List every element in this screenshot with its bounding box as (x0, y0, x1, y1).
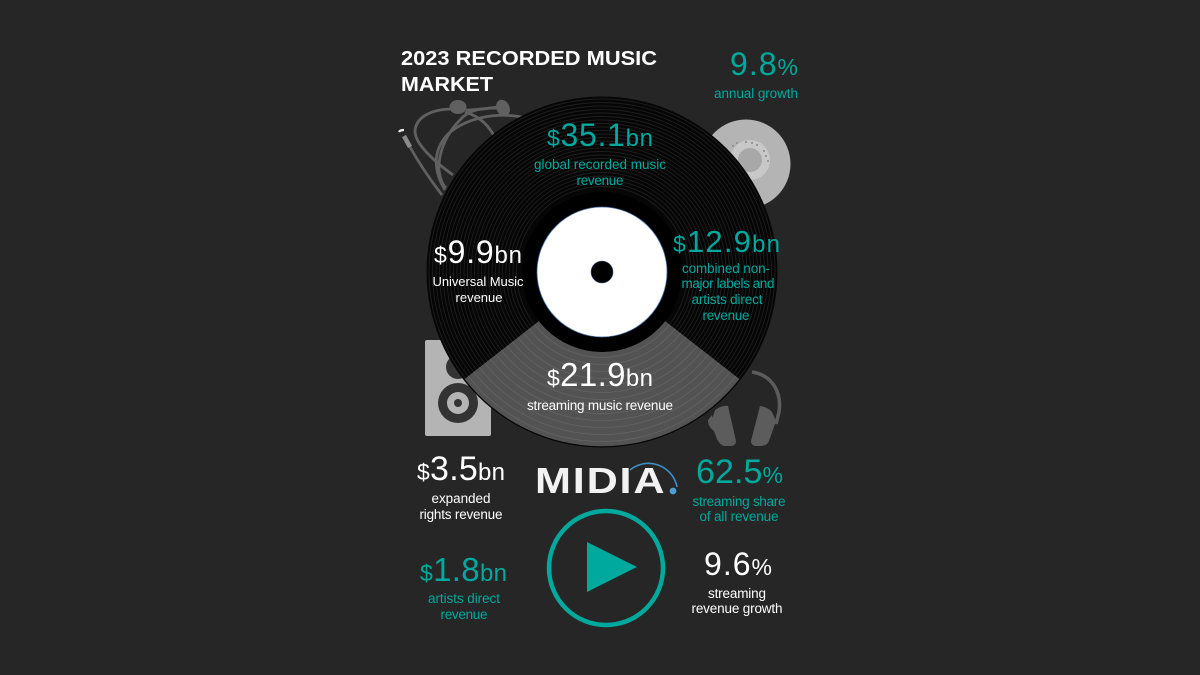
vinyl record (426, 96, 778, 448)
icon: play button (549, 511, 663, 625)
stat: non-major revenue: major labels and (682, 276, 774, 291)
stat: streaming growth: revenue growth (692, 601, 782, 616)
stat: universal revenue (432, 234, 524, 305)
stat: expanded rights: rights revenue (420, 507, 502, 522)
stat: non-major revenue (673, 224, 780, 323)
stat: expanded rights: expanded (432, 491, 490, 506)
stat: streaming growth: streaming (708, 586, 766, 601)
stat: streaming growth (692, 546, 782, 616)
stat: expanded rights (417, 450, 505, 522)
sector grooves (468, 324, 736, 442)
stat: universal revenue: Universal Music (432, 274, 524, 289)
record label (537, 207, 667, 337)
stat: global revenue: $35.1bn (547, 117, 653, 153)
icon: compact disc (702, 120, 790, 208)
title (401, 47, 657, 96)
title: 2023 RECORDED MUSIC (401, 47, 657, 70)
stat: non-major revenue: combined non- (682, 261, 770, 276)
stat: artists direct: $1.8bn (420, 551, 507, 588)
stat: streaming revenue: streaming music revenue (527, 398, 673, 413)
stat: streaming share: streaming share (692, 494, 786, 509)
stat: non-major revenue: $12.9bn (673, 224, 780, 259)
stat: global revenue: revenue (576, 173, 624, 188)
stat: universal revenue: $9.9bn (434, 234, 522, 270)
icon: speaker (425, 340, 491, 436)
grooves (429, 99, 775, 445)
stat: artists direct: artists direct (428, 591, 500, 606)
stat: streaming share (692, 453, 786, 524)
stat: streaming revenue: $21.9bn (547, 356, 653, 393)
stat: non-major revenue: revenue (702, 308, 750, 323)
streaming sector (465, 321, 739, 446)
spindle hole (591, 261, 613, 283)
stat: streaming revenue (527, 356, 673, 413)
stat: streaming share: of all revenue (700, 509, 778, 524)
stat: global revenue (534, 117, 666, 188)
stat: expanded rights: $3.5bn (417, 450, 505, 488)
stat: non-major revenue: artists direct (692, 292, 763, 307)
title: MARKET (401, 73, 493, 96)
stat: annual growth (714, 46, 798, 101)
stat: streaming share: 62.5% (696, 453, 783, 491)
stat: artists direct (420, 551, 507, 622)
icon: earphones (399, 98, 522, 195)
stat: global revenue: global recorded music (534, 157, 666, 172)
stat: annual growth: 9.8% (730, 46, 798, 82)
logo: MIDiA: MIDIA (535, 461, 666, 501)
stat: streaming growth: 9.6% (704, 546, 772, 582)
centre ring (522, 192, 682, 352)
stat: universal revenue: revenue (456, 290, 502, 305)
stat: artists direct: revenue (440, 607, 488, 622)
icon: headphones (708, 372, 780, 446)
stat: annual growth: annual growth (714, 86, 798, 101)
